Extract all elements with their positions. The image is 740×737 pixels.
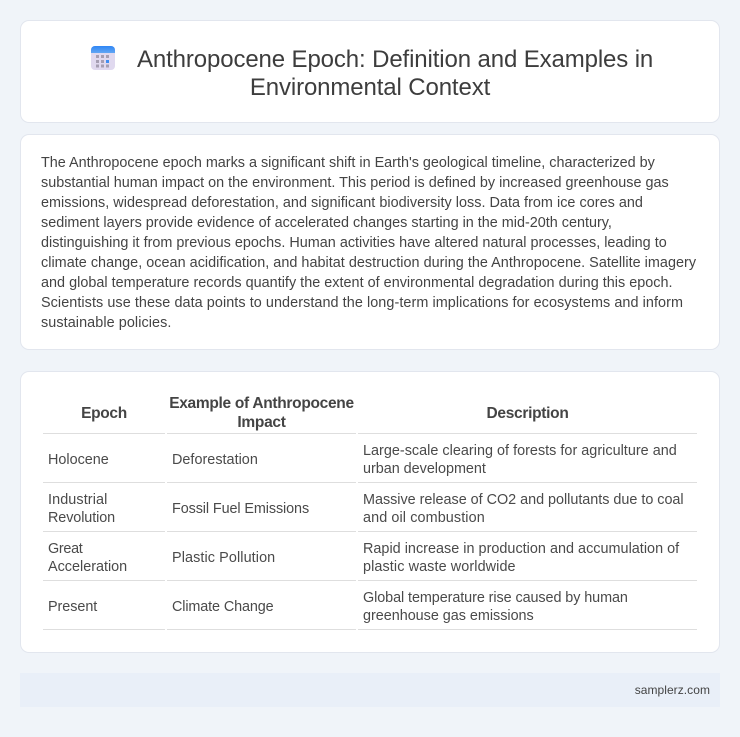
table header: Description: Description xyxy=(487,405,568,422)
intro text: The Anthropocene epoch marks a significant shift in Earth's geological timeline, characterized by xyxy=(41,155,655,171)
title: Anthropocene Epoch: Definition and Examples in xyxy=(137,46,653,73)
intro text: distinguishing it from previous epochs. Human activities have altered natural processes, leading to xyxy=(41,235,667,251)
row: Climate description: Global temperature rise caused by human xyxy=(363,590,628,606)
title xyxy=(137,46,653,101)
intro text: emissions, widespread deforestation, and significant biodiversity loss. Data from ice cores and xyxy=(41,195,643,211)
row: Deforestation description: urban development xyxy=(363,461,486,477)
row: Deforestation description: Large-scale clearing of forests for agriculture and xyxy=(363,443,677,459)
row: Industrial Revolution epoch: Industrial xyxy=(48,492,107,508)
table header: Example of Anthropocene Impact xyxy=(169,395,354,431)
row: Deforestation description xyxy=(363,443,677,477)
table header: Example of Anthropocene Impact: Impact xyxy=(237,414,286,431)
intro text: sustainable policies. xyxy=(41,315,171,331)
row: Climate description: greenhouse gas emissions xyxy=(363,608,534,624)
table header: Example of Anthropocene Impact: Example of Anthropocene xyxy=(169,395,354,412)
row: Holocene epoch: Holocene xyxy=(48,452,109,468)
footer text: samplerz.com xyxy=(635,683,710,697)
row: Fossil Fuel description xyxy=(363,492,684,526)
row: Plastic description: plastic waste worldwide xyxy=(363,559,516,575)
header card xyxy=(20,20,720,123)
row: Industrial Revolution epoch xyxy=(48,492,115,526)
row: Great Acceleration epoch: Great xyxy=(48,541,82,557)
icon: calendar xyxy=(91,46,115,70)
panel: intro paragraph xyxy=(20,134,720,350)
intro text: climate change, ocean acidification, and habitat destruction during the Anthropocene. Satellite imagery xyxy=(41,255,696,271)
row: Plastic description: Rapid increase in production and accumulation of xyxy=(363,541,679,557)
intro text: substantial human impact on the environment. This period is defined by increased greenhouse gas xyxy=(41,175,669,191)
footer bar xyxy=(20,673,720,707)
row: Present epoch: Present xyxy=(48,599,97,615)
intro text: Scientists use these data points to understand the long-term implications for ecosystems and inform xyxy=(41,295,683,311)
row: Fossil Fuel description: Massive release of CO2 and pollutants due to coal xyxy=(363,492,684,508)
intro text: and global temperature records quantify the extent of environmental degradation during this epoch. xyxy=(41,275,673,291)
row: Fossil Fuel description: and oil combustion xyxy=(363,510,485,526)
intro text: sediment layers provide evidence of accelerated changes starting in the mid-20th century, xyxy=(41,215,612,231)
row: Fossil Fuel Emissions: Fossil Fuel Emissions xyxy=(172,501,309,517)
intro text xyxy=(41,155,696,331)
row: Industrial Revolution epoch: Revolution xyxy=(48,510,115,526)
panel: table xyxy=(20,371,720,653)
table header: Epoch: Epoch xyxy=(81,405,127,422)
row: Great Acceleration epoch xyxy=(48,541,127,575)
row: Climate Change: Climate Change xyxy=(172,599,274,615)
row: Deforestation: Deforestation xyxy=(172,452,258,468)
row: Climate description xyxy=(363,590,628,624)
row: Great Acceleration epoch: Acceleration xyxy=(48,559,127,575)
row: Plastic Pollution: Plastic Pollution xyxy=(172,550,275,566)
row: Plastic description xyxy=(363,541,680,575)
title: Environmental Context xyxy=(250,74,490,101)
